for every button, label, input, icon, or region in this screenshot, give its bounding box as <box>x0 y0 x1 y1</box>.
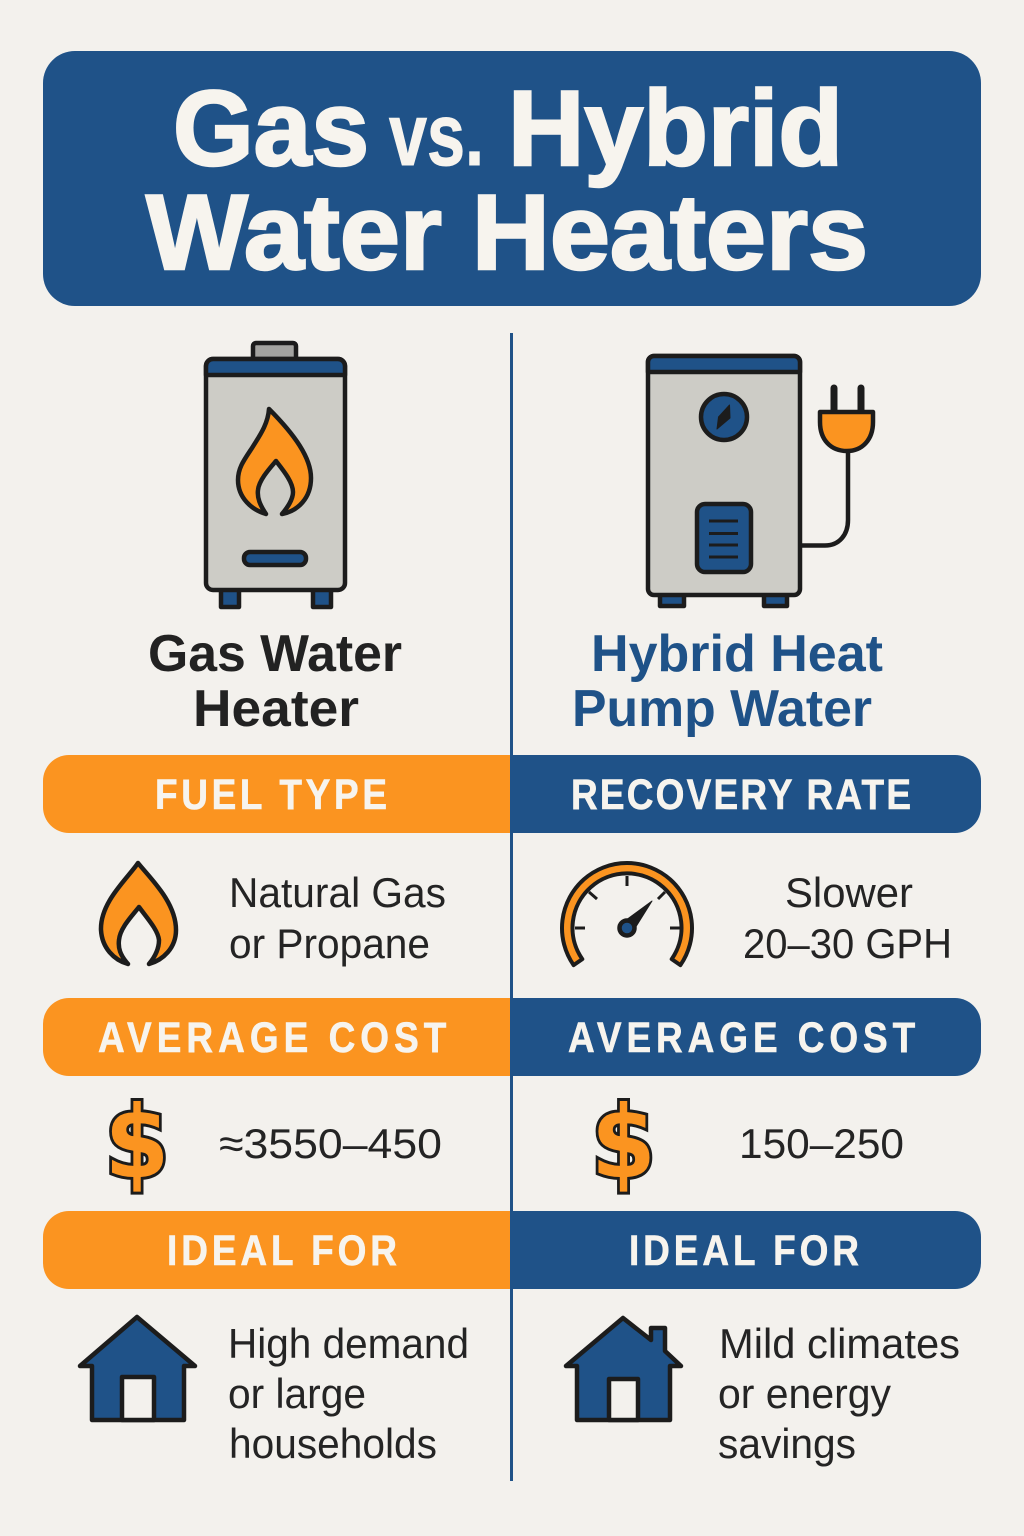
fuel type text: Natural Gas <box>229 869 446 916</box>
icon: house with chimney <box>566 1318 681 1420</box>
bar: ideal for hybrid: IDEAL FOR <box>629 1227 859 1275</box>
bar: recovery rate: RECOVERY RATE <box>571 771 911 819</box>
ideal for gas text: High demand <box>228 1320 469 1367</box>
bar: fuel type <box>43 755 510 833</box>
ideal for hybrid text <box>718 1320 960 1467</box>
icon: hybrid heat pump water heater <box>648 356 873 606</box>
icon: gas water heater <box>206 343 345 607</box>
icon: dollar hybrid: $ <box>591 1084 656 1201</box>
heading: gas water heater: Heater <box>193 680 359 738</box>
bar: average cost hybrid: AVERAGE COST <box>568 1014 916 1062</box>
fuel type text: or Propane <box>229 920 430 967</box>
title <box>146 68 868 292</box>
average cost hybrid text: 150–250 <box>739 1120 904 1167</box>
ideal for hybrid text: savings <box>718 1420 856 1467</box>
fuel type text <box>229 869 446 967</box>
heading: gas water heater: Gas Water <box>148 625 402 683</box>
heading: gas water heater <box>148 625 402 738</box>
center divider <box>510 333 513 1481</box>
average cost gas text: ≈3550–450 <box>219 1120 442 1167</box>
bar: average cost gas <box>43 998 510 1076</box>
title banner <box>43 51 981 306</box>
bar: fuel type: FUEL TYPE <box>155 771 387 819</box>
bar: average cost hybrid <box>510 998 981 1076</box>
title: Water Heaters <box>146 172 868 292</box>
heading: hybrid heat pump water: Hybrid Heat <box>591 625 883 683</box>
icon: house <box>80 1317 195 1420</box>
ideal for gas text: or large <box>228 1370 366 1417</box>
bar: ideal for gas <box>43 1211 510 1289</box>
heading: hybrid heat pump water: Pump Water <box>572 680 872 738</box>
bar: recovery rate <box>510 755 981 833</box>
icon: flame <box>101 863 176 964</box>
ideal for hybrid text: or energy <box>718 1370 891 1417</box>
ideal for hybrid text: Mild climates <box>719 1320 960 1367</box>
recovery rate text: Slower <box>785 869 913 916</box>
title: Gas <box>173 68 369 188</box>
heading: hybrid heat pump water <box>572 625 883 738</box>
icon: gauge <box>562 863 692 965</box>
bar: ideal for gas: IDEAL FOR <box>167 1227 397 1275</box>
title: vs. <box>389 85 484 184</box>
title: Hybrid <box>508 68 843 188</box>
bar: ideal for hybrid <box>510 1211 981 1289</box>
ideal for gas text <box>228 1320 469 1467</box>
recovery rate text: 20–30 GPH <box>743 920 952 967</box>
icon: dollar gas: $ <box>105 1084 169 1201</box>
recovery rate text <box>743 869 952 967</box>
bar: average cost gas: AVERAGE COST <box>98 1014 447 1062</box>
ideal for gas text: households <box>229 1420 437 1467</box>
